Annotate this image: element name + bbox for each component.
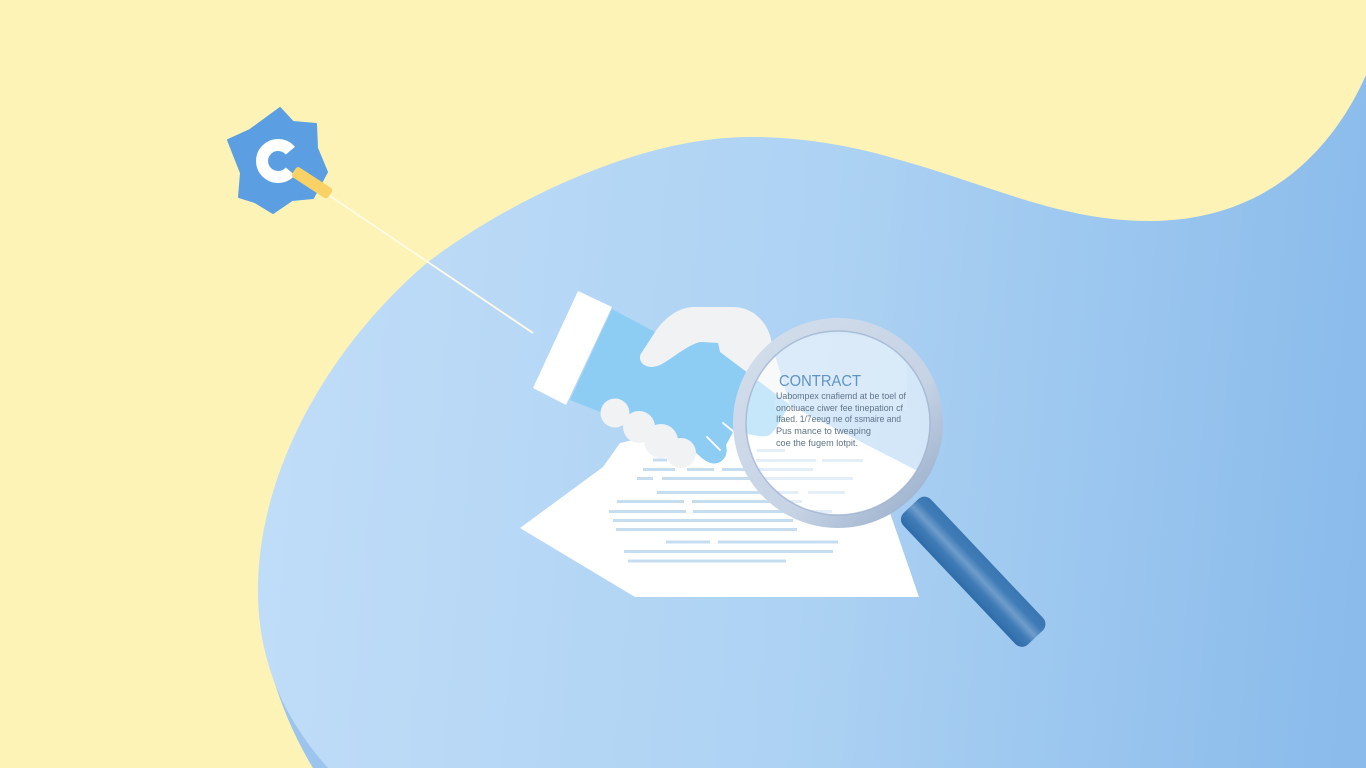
handle: [897, 493, 1049, 651]
contract body copy: [776, 391, 906, 449]
contract title: CONTRACT: [779, 373, 862, 390]
white cuff: [533, 291, 612, 405]
lens soft highlight: [775, 335, 907, 410]
icon: yellow tab: [291, 166, 333, 199]
icon: letter C: [262, 145, 290, 177]
magnifying glass: [740, 324, 1049, 651]
contract body copy: Uabompex cnafiemd at be toel of: [776, 391, 906, 402]
contract body copy: Ifaed. 1/7eeug ne of ssmaire and: [776, 414, 901, 425]
lens tint: [746, 331, 930, 515]
lens text: contract: [776, 373, 906, 449]
illustration: handshake and contract under magnifying glass: [227, 75, 1366, 768]
lens glass: [740, 324, 936, 522]
finger slits: [707, 423, 734, 450]
white hand: [640, 307, 790, 405]
contract body copy: Pus mance to tweaping: [776, 426, 871, 437]
connecting line: [330, 196, 533, 333]
paper text lines: [609, 449, 863, 562]
blue arm and hand: [570, 309, 790, 464]
lens ring: [740, 324, 936, 522]
contract paper: [520, 395, 935, 597]
white fingers: [600, 398, 696, 468]
contract body copy: coe the fugem lotpit.: [776, 438, 858, 449]
handshake: [533, 291, 790, 468]
paper sheet: [520, 395, 919, 597]
contract body copy: onotiuace ciwer fee tinepation cf: [776, 403, 903, 414]
lens inner edge: [746, 331, 930, 515]
badge: C logo with yellow tab and line: [228, 108, 533, 333]
blue organic shape: [258, 75, 1366, 768]
lens-refracted paper area: [790, 405, 916, 501]
icon: blue badge: [228, 108, 327, 213]
rim shadow of blue shape: [268, 660, 340, 768]
